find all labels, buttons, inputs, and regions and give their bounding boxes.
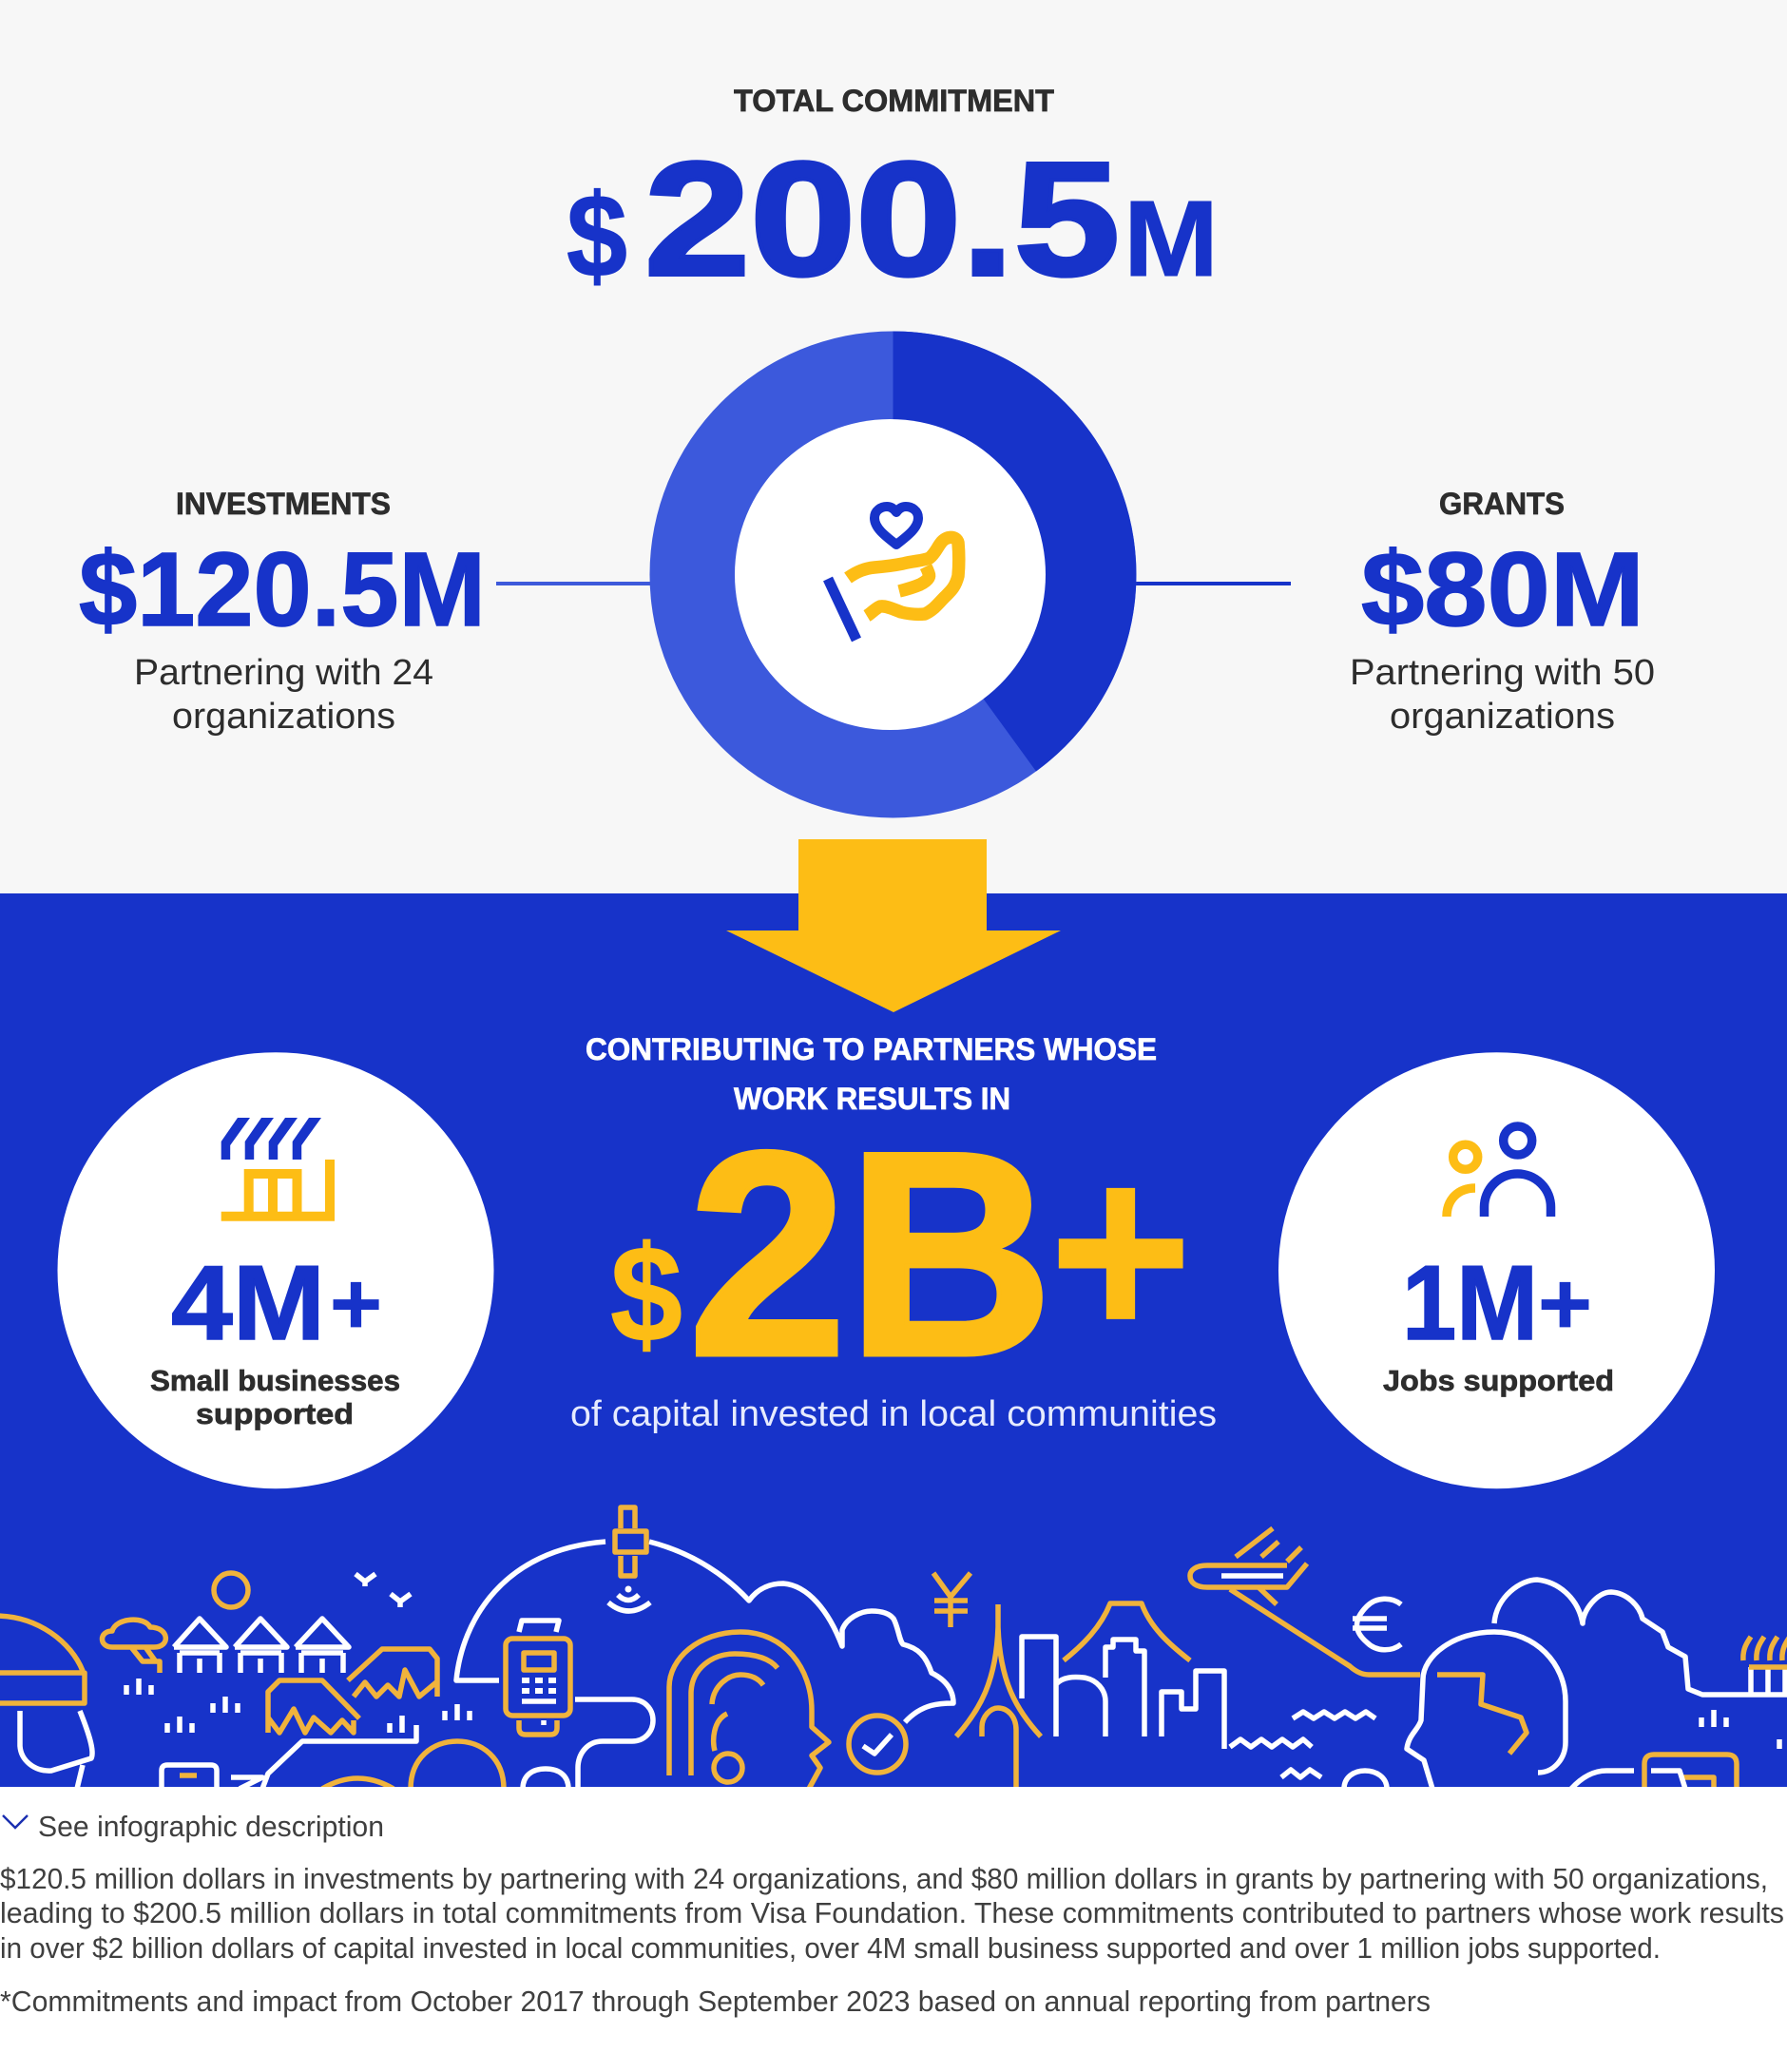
icon: water waves — [1230, 1712, 1387, 1789]
icon: head with sound waves — [669, 1632, 829, 1789]
label: jobs supported: Jobs supported — [1383, 1364, 1614, 1397]
icon: people — [1447, 1126, 1551, 1217]
text: description paragraph: in over $2 billion dollars of capital invested in local communities, over 4M small business supported and over 1 million jobs supported. — [0, 1931, 1661, 1965]
text: description paragraph — [0, 1862, 1784, 1965]
heading: contributing to partners — [586, 1032, 1157, 1116]
label: investments: INVESTMENTS — [176, 487, 391, 521]
path: dome and cloud line — [456, 1542, 953, 1722]
panel: jobs supported — [1278, 1052, 1715, 1488]
icon: euro — [1353, 1599, 1401, 1650]
text: investments partners — [134, 653, 433, 737]
connector line: grants — [1135, 582, 1291, 585]
text: of capital invested: of capital invested in local communities — [570, 1394, 1217, 1434]
icon: chevron — [3, 1815, 28, 1828]
icon: airplane — [1190, 1528, 1307, 1604]
block: grants — [1350, 487, 1655, 737]
connector line: investments — [496, 582, 650, 585]
panel: total commitment background — [0, 0, 1787, 893]
panel: small businesses — [57, 1052, 494, 1488]
label: small businesses supported: supported — [196, 1397, 354, 1430]
panel: description background — [0, 1787, 1787, 2072]
text: investments partners: Partnering with 24 — [134, 653, 433, 693]
stat: total $200.5M — [567, 129, 1219, 310]
icon: hand holding heart — [828, 507, 959, 640]
icon: payment terminal — [506, 1621, 570, 1735]
icon: phone — [162, 1765, 262, 1789]
text: grants partners: Partnering with 50 — [1350, 653, 1655, 693]
icon: right head — [1407, 1632, 1566, 1789]
icon: left head with helmet — [0, 1616, 92, 1789]
stat: $2B+: + — [1049, 1107, 1192, 1392]
arrow: down — [726, 839, 1061, 1012]
icon: check circle — [849, 1716, 906, 1773]
label: grants: GRANTS — [1439, 487, 1565, 521]
stat: $80M: $80M — [1361, 531, 1644, 648]
stat: total $200.5M: M — [1124, 179, 1219, 298]
heading: contributing to partners: WORK RESULTS IN — [734, 1082, 1010, 1116]
panel: impact background — [0, 893, 1787, 1787]
path: flight line — [1230, 1589, 1527, 1754]
label: small businesses supported — [150, 1364, 400, 1430]
stat: $2B+: $ — [610, 1218, 682, 1371]
block: investments — [79, 487, 486, 737]
donut chart: investments vs grants — [650, 331, 1137, 817]
path: right cloud — [1494, 1580, 1787, 1695]
stat: $2B+: 2B — [688, 1091, 1053, 1416]
stat: 4M+ — [171, 1244, 382, 1362]
icon: city buildings — [1022, 1637, 1224, 1749]
stat: total $200.5M: 200.5 — [644, 129, 1120, 310]
stat: 1M+: 1M — [1402, 1244, 1538, 1362]
icon: tower — [956, 1604, 1041, 1789]
text: footnote: *Commitments and impact from October 2017 through September 2023 based on annual reporting from partners — [0, 1985, 1431, 2018]
icon: satellite — [608, 1507, 650, 1611]
stat: total $200.5M: $ — [567, 171, 627, 302]
text: description paragraph: leading to $200.5 million dollars in total commitments from Visa Foundation. These commitments contributed to partners whose work results — [0, 1896, 1784, 1929]
stat: $120.5M: $120.5M — [79, 531, 486, 648]
stat: 1M+: + — [1538, 1256, 1592, 1353]
icon: right factory — [1743, 1637, 1787, 1695]
icon: mountain — [1064, 1603, 1190, 1660]
icon: bottom right card — [1571, 1755, 1737, 1789]
icon: tree cloud — [103, 1620, 165, 1673]
stat: 4M+: + — [330, 1256, 382, 1353]
label: small businesses supported: Small businesses — [150, 1364, 400, 1397]
stat: $2B+ — [610, 1091, 1192, 1416]
icon: factory — [221, 1118, 330, 1217]
decoration: grass — [126, 1679, 1779, 1749]
illustration: community line art — [0, 1507, 1787, 1789]
heading: contributing to partners: CONTRIBUTING TO PARTNERS WHOSE — [586, 1032, 1157, 1066]
text: grants partners — [1350, 653, 1655, 737]
icon: yen — [933, 1573, 970, 1627]
heading: total commitment: TOTAL COMMITMENT — [734, 84, 1054, 118]
icon: gold fields — [268, 1649, 437, 1733]
stat: 4M+: 4M — [171, 1244, 325, 1362]
text: investments partners: organizations — [172, 697, 395, 737]
path: lower left line — [262, 1725, 416, 1789]
icon: sun — [214, 1573, 248, 1607]
text: see description: See infographic description — [38, 1810, 384, 1843]
icon: houses — [174, 1619, 349, 1673]
decoration: bottom arcs — [322, 1741, 504, 1789]
text: grants partners: organizations — [1390, 697, 1615, 737]
icon: birds — [355, 1574, 411, 1607]
path: card reader connector — [575, 1699, 653, 1789]
